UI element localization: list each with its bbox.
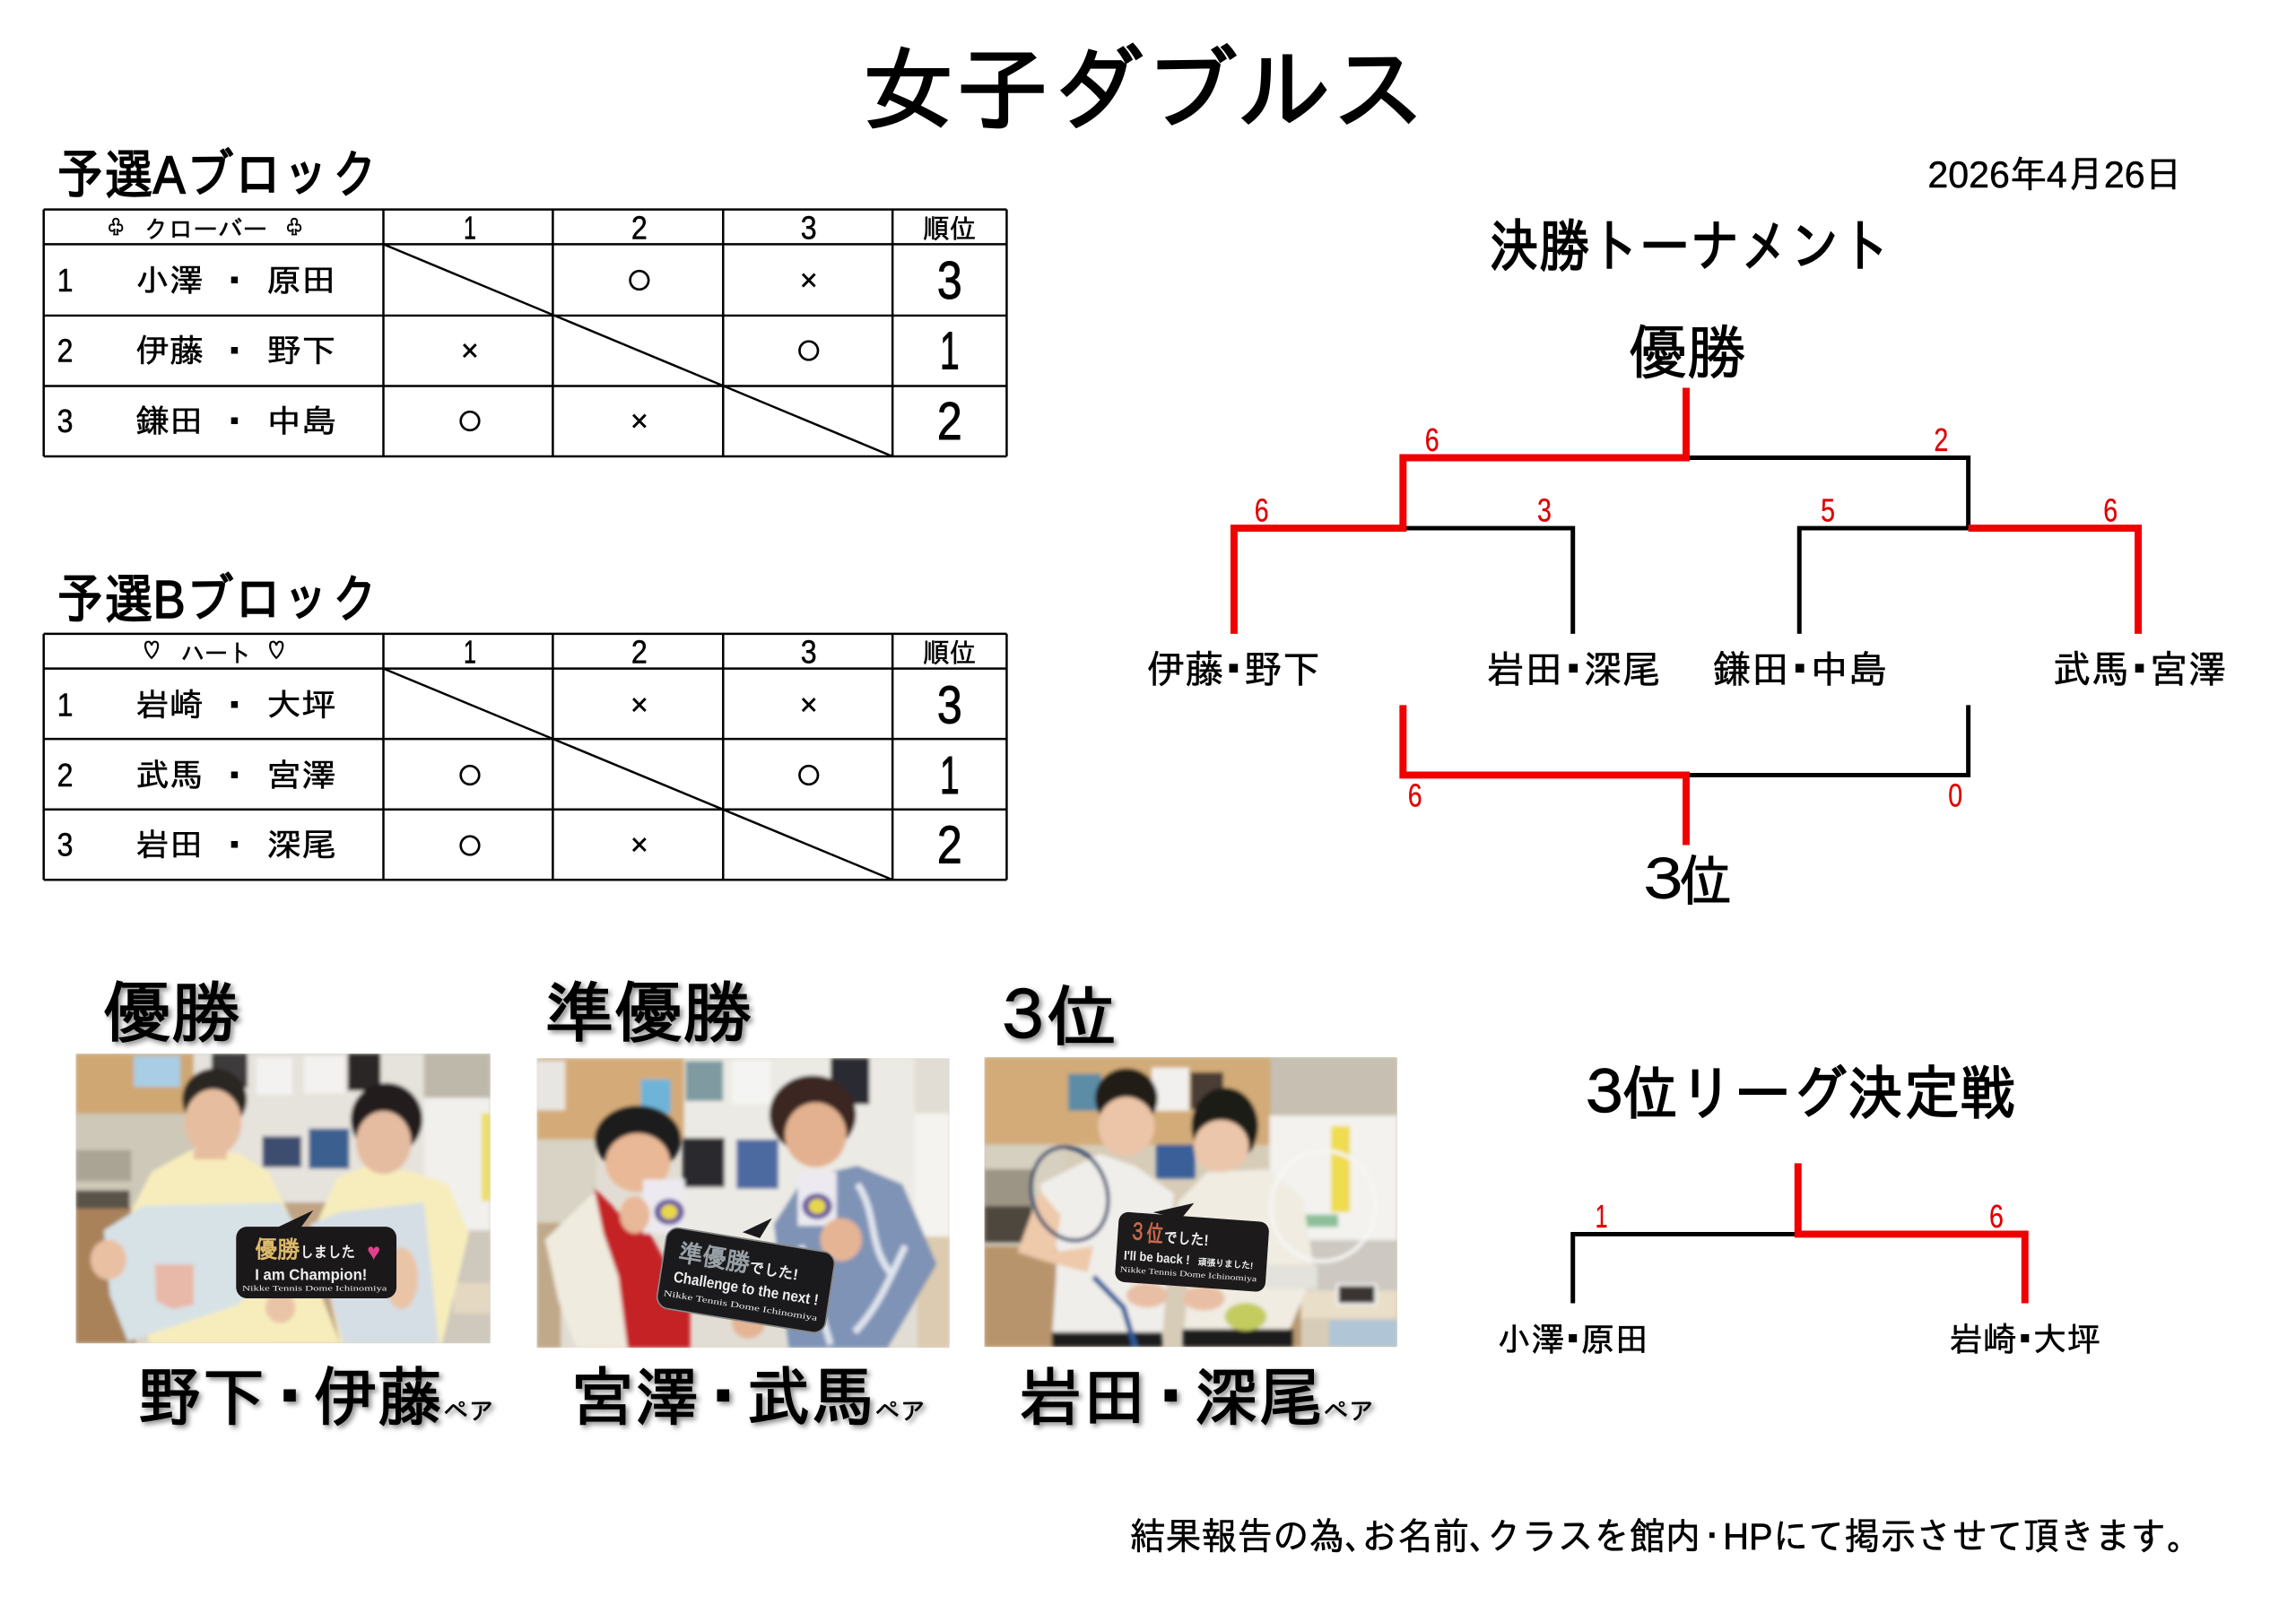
label: champion: 優勝: [1628, 321, 1746, 386]
row B2: ○: [456, 747, 484, 799]
row B1: ×: [800, 688, 818, 722]
sign: runner-up: Challenge to the next !: [673, 1268, 820, 1309]
finalist names: 武馬・宮澤: [2053, 649, 2226, 692]
pair name: third place: ペア: [1323, 1398, 1374, 1426]
sign: third place: 頑張りました!: [1196, 1257, 1254, 1271]
row A1: 小澤: [135, 263, 204, 299]
sign: champion: I am Champion!: [255, 1266, 367, 1283]
row A1: ×: [800, 264, 818, 298]
row B1: [57, 674, 962, 734]
sign: third place: [1115, 1198, 1271, 1292]
row B3: 深尾: [266, 827, 336, 863]
scores: [1255, 422, 2118, 529]
table header A: ♧: [109, 211, 124, 245]
table header B: [144, 633, 977, 671]
row B2: ・: [220, 759, 249, 794]
row B2: 武馬: [135, 758, 204, 794]
sign: third place: I'll be back !: [1123, 1249, 1190, 1268]
table header B: 2: [631, 635, 648, 671]
row A2: ×: [461, 334, 479, 369]
pair name: runners-up: ペア: [874, 1398, 926, 1426]
table header B: 1: [464, 635, 476, 671]
table header A: 1: [464, 210, 476, 246]
table header A: クローバー: [144, 215, 267, 243]
row B3: 3: [57, 827, 74, 863]
row A3: 鎌田: [135, 403, 204, 439]
row A1: 原田: [266, 263, 336, 299]
table header B: ハート: [181, 640, 251, 668]
row A1: 3: [937, 250, 962, 310]
row B3: 2: [937, 814, 962, 874]
row A1: [57, 250, 962, 310]
label: third place: [1632, 851, 1733, 913]
heading: block A: 予選Aブロック: [57, 145, 379, 205]
row B1: 1: [57, 687, 74, 723]
league names: 小澤・原田: [1497, 1322, 1648, 1359]
row A2: 伊藤: [135, 334, 204, 369]
finalist names: 伊藤・野下: [1147, 649, 1320, 692]
label: third place: ３: [1632, 851, 1695, 913]
row B3: ×: [631, 828, 648, 862]
row B2: [57, 745, 960, 805]
row A3: 2: [937, 391, 962, 451]
row B3: ○: [456, 817, 484, 869]
bracket: final tournament: [1234, 387, 2138, 634]
row B3: [57, 814, 962, 874]
finalist names: 岩田・深尾: [1486, 649, 1660, 692]
scores: 6: [1425, 422, 1439, 458]
winners label: third place: 位: [1046, 980, 1118, 1054]
bracket: third place: 6: [1408, 778, 1422, 814]
row B1: ・: [220, 689, 249, 723]
scores: 6: [2103, 493, 2118, 529]
row A3: ○: [456, 393, 484, 445]
scores: 3: [1537, 493, 1552, 529]
table header B: ♡: [144, 633, 160, 670]
pair name: third place: 岩田・深尾: [1018, 1363, 1322, 1435]
scores: 2: [1934, 422, 1948, 458]
table: block A: [44, 210, 1006, 456]
pair name: champions: 野下・伊藤: [137, 1363, 441, 1435]
scores: 6: [1255, 493, 1269, 529]
row A1: ○: [625, 252, 653, 304]
heading: third league decider: 位リーグ決定戦: [1622, 1062, 2016, 1127]
row A2: 1: [940, 321, 960, 381]
winners label: third place: [991, 980, 1118, 1054]
sign: champion: ♥: [367, 1240, 380, 1265]
table header A: [109, 210, 977, 246]
sign: runner-up: でした!: [748, 1259, 799, 1284]
row B2: ○: [795, 747, 822, 799]
row B1: 岩崎: [135, 687, 204, 723]
bracket: third place: [1403, 705, 1969, 845]
row B2: 2: [57, 758, 74, 794]
row A3: [57, 391, 962, 451]
sign: runner-up: 準優勝: [677, 1238, 752, 1278]
row B1: 3: [937, 674, 962, 734]
bracket: third league decider: 6: [1989, 1199, 2004, 1235]
sign: champion: [236, 1210, 396, 1298]
label: third place: 位: [1679, 851, 1733, 913]
row A1: 1: [57, 263, 74, 299]
sign: runner-up: [656, 1201, 839, 1334]
league names: 岩崎・大坪: [1949, 1322, 2100, 1359]
finalist names: 鎌田・中島: [1713, 649, 1887, 692]
sign: champion: 優勝: [255, 1237, 300, 1263]
table header B: 3: [801, 635, 817, 671]
table header A: 2: [631, 210, 648, 246]
bracket: third league decider: 1: [1596, 1199, 1607, 1235]
photo: runners-up: [536, 1058, 950, 1349]
winners label: champion: 優勝: [102, 976, 239, 1051]
row A3: ×: [631, 404, 648, 438]
sign: runner-up: Nikke Tennis Dome Ichinomiya: [663, 1288, 818, 1323]
row A3: 3: [57, 403, 74, 439]
row B2: 宮澤: [266, 758, 336, 794]
scores: 5: [1821, 493, 1835, 529]
league names: [1497, 1322, 2100, 1359]
row A3: 中島: [266, 403, 336, 439]
row A1: ・: [220, 265, 249, 299]
row A2: 2: [57, 334, 74, 369]
row A2: [57, 321, 960, 381]
sign: third place: Nikke Tennis Dome Ichinomiya: [1119, 1264, 1257, 1283]
bracket: third place: 0: [1948, 778, 1962, 814]
sign: champion: しました: [300, 1244, 355, 1262]
row B3: ・: [220, 828, 249, 863]
table: block B: [44, 633, 1006, 880]
pair name: champions: ペア: [443, 1398, 494, 1426]
heading: third league decider: ３: [1576, 1062, 1634, 1127]
row A3: ・: [220, 405, 249, 439]
footer note: 結果報告の為、お名前、クラスを館内・HPにて掲示させて頂きます。: [1130, 1515, 2203, 1557]
heading: block B: 予選Bブロック: [57, 569, 379, 629]
row B1: 大坪: [266, 687, 336, 723]
finalist names: [1147, 649, 2226, 692]
row B2: 1: [940, 745, 960, 805]
bracket: third league decider: [1573, 1163, 2025, 1303]
row B3: 岩田: [135, 827, 204, 863]
title: 女子ダブルス: [861, 39, 1426, 143]
winners label: runners-up: 準優勝: [544, 976, 752, 1051]
pair name: runners-up: 宮澤・武馬: [570, 1363, 874, 1435]
row B1: ×: [631, 688, 648, 722]
row A2: 野下: [266, 334, 336, 369]
table header A: ♧: [287, 211, 302, 245]
row A2: ○: [795, 323, 822, 375]
table header A: 順位: [923, 214, 977, 244]
sign: champion: Nikke Tennis Dome Ichinomiya: [242, 1284, 387, 1293]
sign: third place: でした!: [1163, 1228, 1209, 1249]
sign: third place: ３位: [1128, 1220, 1164, 1248]
heading: final tournament: 決勝トーナメント: [1489, 215, 1891, 279]
table header B: ♡: [268, 633, 284, 670]
table header A: 3: [801, 210, 817, 246]
table header B: 順位: [923, 639, 977, 669]
photo: champions: [75, 1054, 491, 1343]
row A2: ・: [220, 335, 249, 369]
winners label: third place: ３: [991, 980, 1057, 1054]
photo: third place: [985, 1057, 1397, 1347]
date: 2026年4月26日: [1927, 153, 2182, 195]
